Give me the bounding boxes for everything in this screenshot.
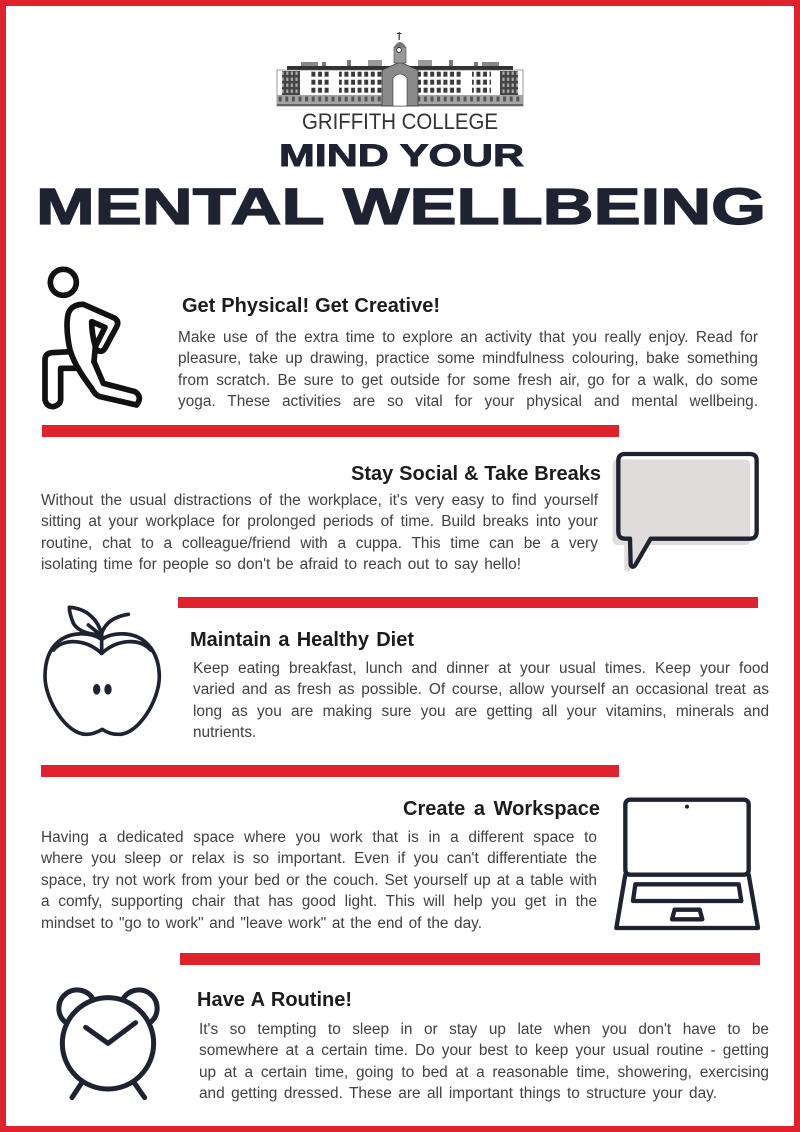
- icon: lunging person: [42, 266, 142, 410]
- text: stay social: [41, 492, 598, 573]
- text: get physical: from scratch. Be sure to get outside for some fresh air, go for a walk, do some: [178, 372, 758, 389]
- heading: stay social: Stay Social & Take Breaks: [351, 463, 601, 485]
- section: workspace: [41, 798, 760, 932]
- divider bar four: [180, 953, 760, 965]
- section: stay social: [41, 452, 759, 573]
- icon: alarm clock: [56, 987, 160, 1100]
- divider bar one: [42, 425, 619, 437]
- text: workspace: [41, 828, 597, 932]
- text: workspace: mindset to "go to work" and "leave work" at the end of the day.: [41, 915, 482, 932]
- icon: speech bubble: [612, 452, 759, 572]
- text: routine: [199, 1020, 769, 1102]
- text: routine: somewhere at a certain time. Do your best to keep your usual routine - getting: [199, 1042, 769, 1059]
- text: stay social: isolating time for people so don't be afraid to reach out to say hello!: [41, 556, 521, 573]
- text: get physical: Make use of the extra time to explore an activity that you really enjoy. Read for: [178, 328, 758, 346]
- section: healthy diet: [43, 606, 769, 741]
- text: stay social: routine, chat to a colleague/friend with a cuppa. This time can be a very: [41, 535, 598, 552]
- text: stay social: sitting at your workplace for prolonged periods of time. Build breaks into your: [41, 513, 598, 530]
- text: healthy diet: long as you are making sure you are getting all your vitamins, minerals and: [193, 703, 769, 720]
- text: workspace: Having a dedicated space where you work that is in a different space to: [41, 828, 597, 846]
- heading: healthy diet: Maintain a Healthy Diet: [190, 629, 414, 651]
- text: stay social: Without the usual distractions of the workplace, it's very easy to find yourself: [41, 492, 598, 508]
- text: workspace: space, try not work from your bed or the couch. Set yourself up at a table with: [41, 872, 597, 889]
- text: workspace: a comfy, supporting chair that has good light. This will help you get in the: [41, 893, 597, 910]
- title line one: MIND YOUR: [279, 137, 524, 173]
- text: healthy diet: [193, 660, 769, 741]
- heading: workspace: Create a Workspace: [403, 798, 600, 820]
- title line two: MENTAL WELLBEING: [36, 178, 766, 235]
- text: get physical: pleasure, take up drawing, practice some mindfulness colouring, bake something: [178, 350, 758, 367]
- logo wordmark: GRIFFITH COLLEGE: [302, 109, 498, 134]
- section: routine: [56, 987, 769, 1102]
- text: workspace: where you sleep or relax is so important. Even if you can't differentiate the: [41, 850, 597, 867]
- text: routine: up at a certain time, going to bed at a reasonable time, showering, exercising: [199, 1064, 769, 1081]
- text: get physical: yoga. These activities are so vital for your physical and mental wellbeing.: [178, 393, 758, 410]
- divider bar three: [41, 765, 619, 777]
- icon: laptop: [614, 798, 760, 930]
- divider bar two: [178, 597, 758, 608]
- text: healthy diet: varied and as fresh as possible. Of course, allow yourself an occasional treat as: [193, 681, 769, 698]
- text: routine: and getting dressed. These are all important things to structure your day.: [199, 1085, 717, 1102]
- text: get physical: [178, 328, 758, 410]
- text: healthy diet: Keep eating breakfast, lunch and dinner at your usual times. Keep your food: [193, 660, 769, 676]
- section: get physical: [42, 266, 758, 410]
- text: healthy diet: nutrients.: [193, 724, 256, 741]
- heading: routine: Have A Routine!: [197, 989, 352, 1011]
- icon: apple: [43, 606, 162, 736]
- logo: Griffith College building: [276, 32, 524, 106]
- heading: get physical: Get Physical! Get Creative!: [182, 295, 440, 317]
- text: routine: It's so tempting to sleep in or stay up late when you don't have to be: [199, 1020, 769, 1038]
